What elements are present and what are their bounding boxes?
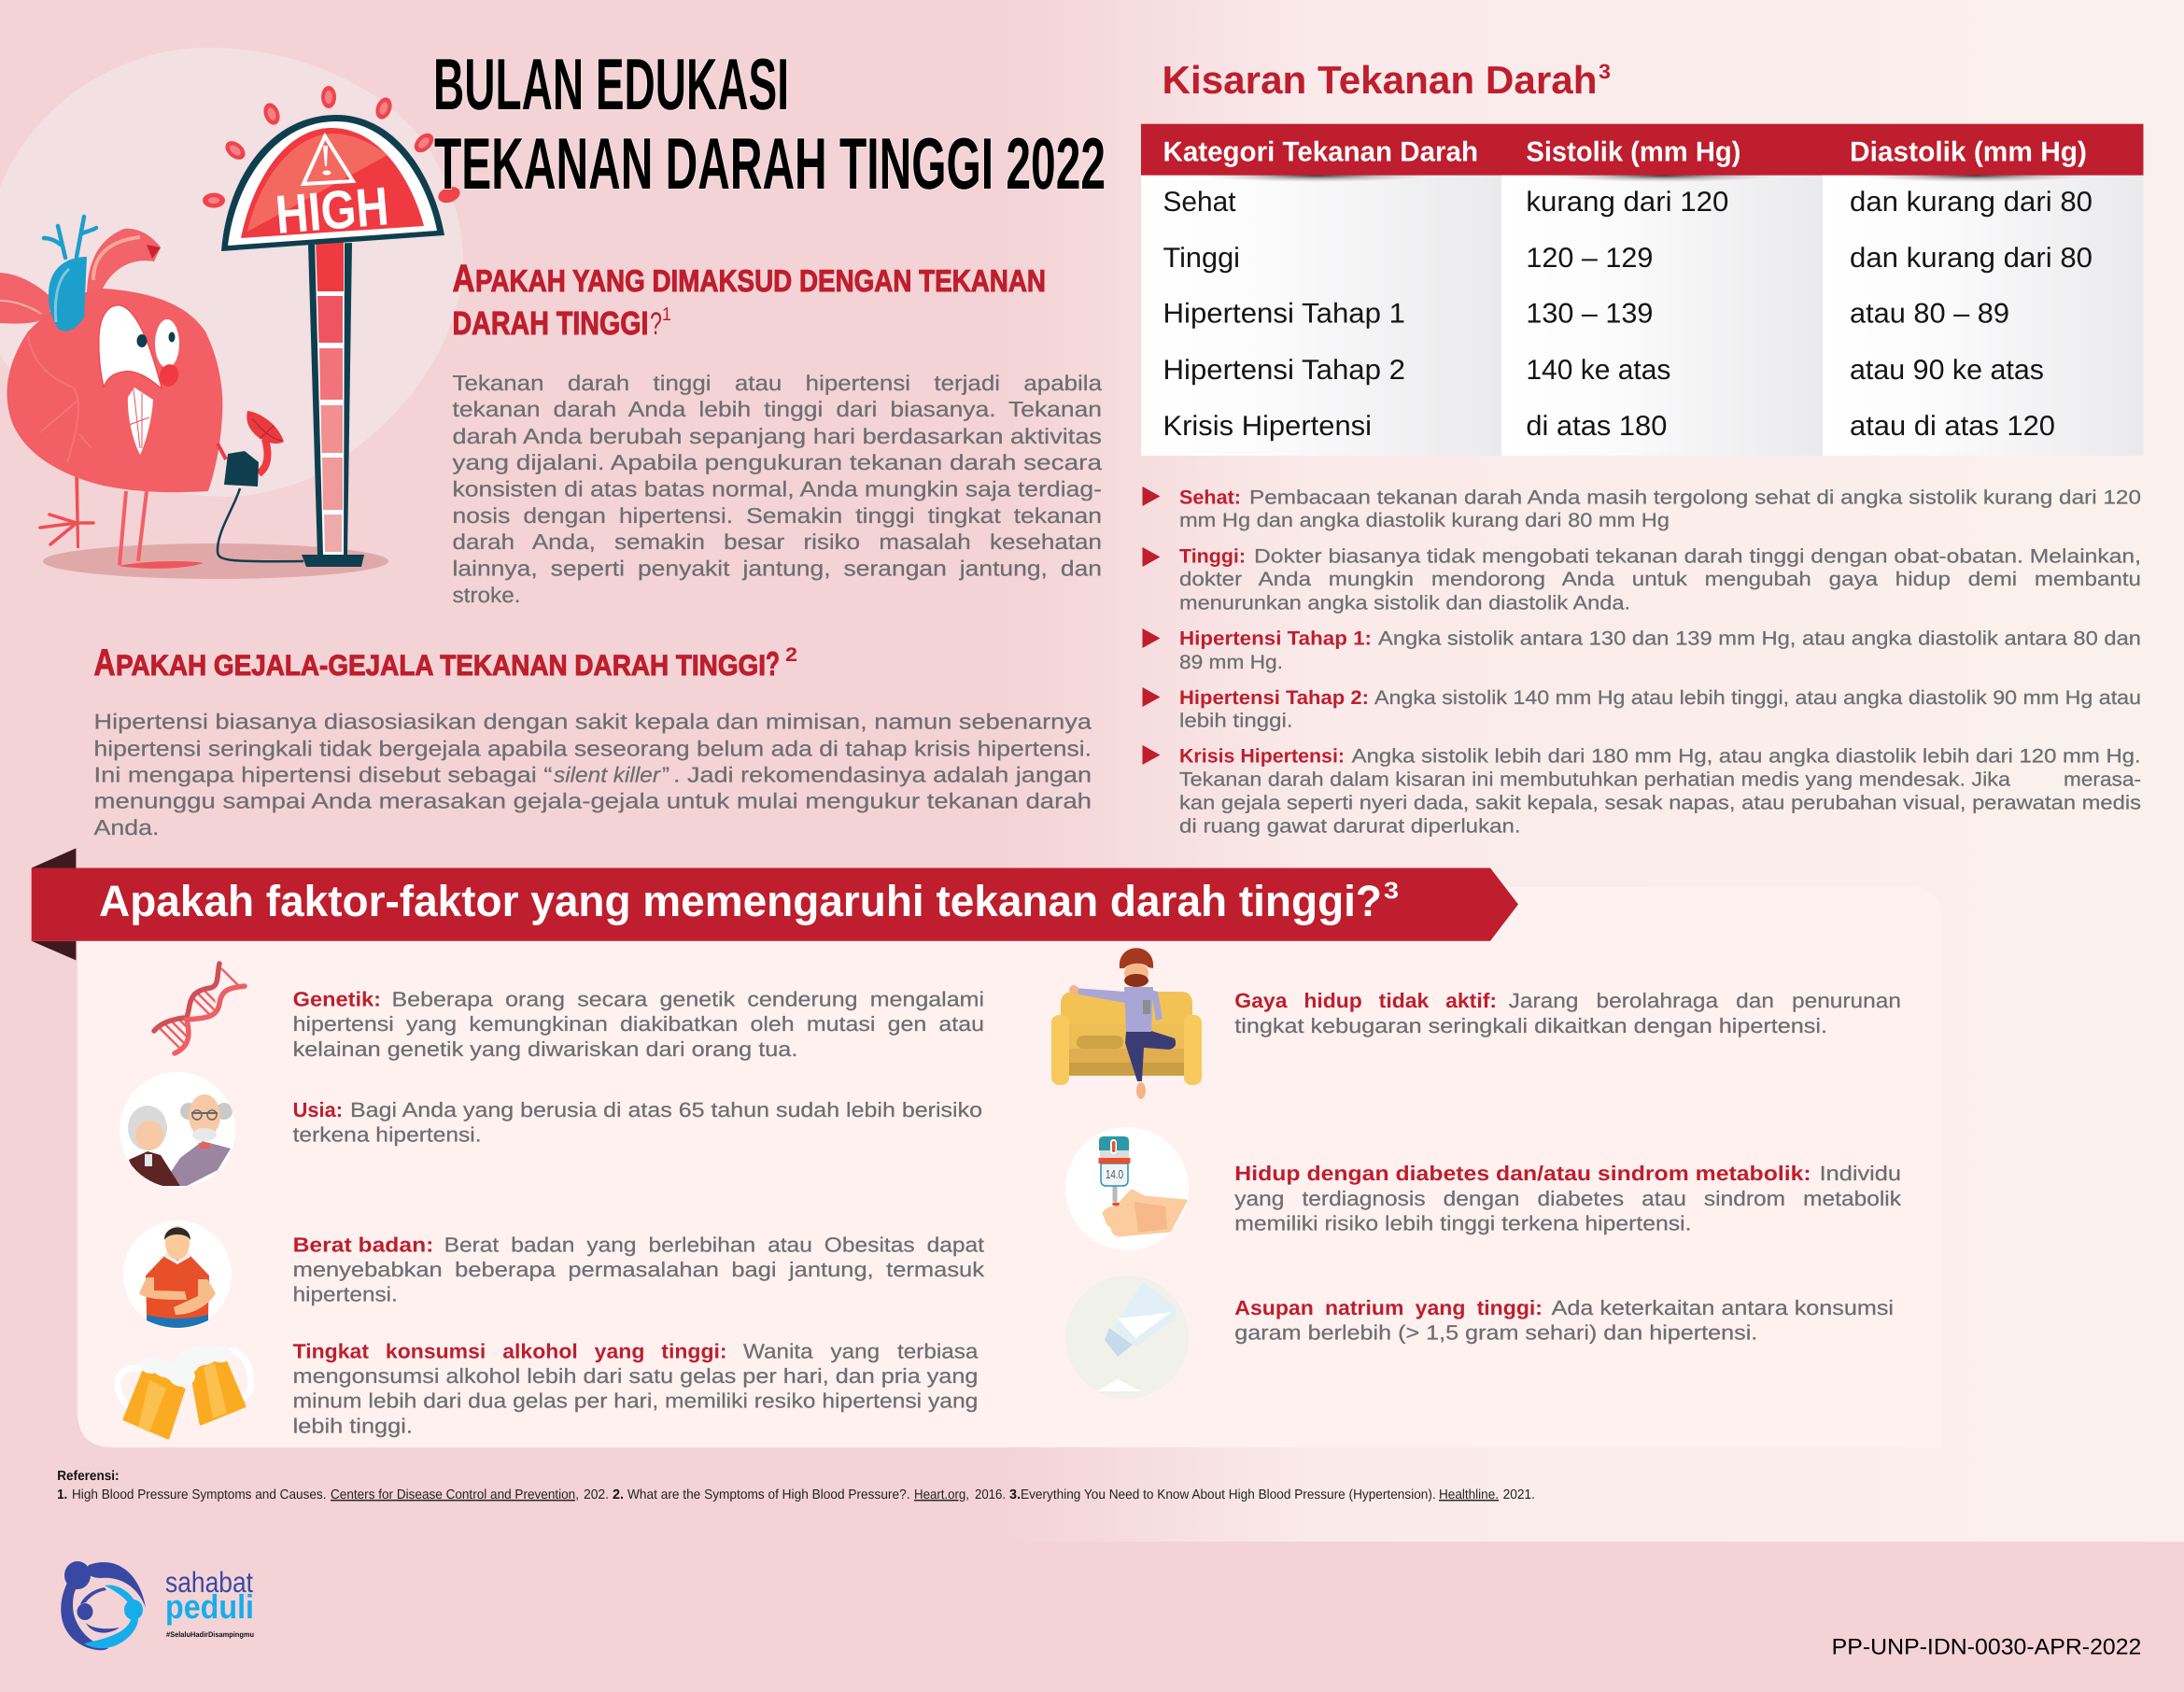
text: konsumsi alkohol: minum lebih dari dua gelas per hari, memiliki resiko hipertensi yang [293, 1389, 978, 1413]
text: berat badan: menyebabkan beberapa permasalahan bagi jantung, termasuk [293, 1258, 985, 1281]
item: hipertensi tahap 2: Hipertensi Tahap 2: [1179, 687, 1369, 709]
item: tinggi: dokter Anda mungkin mendorong Anda untuk mengubah gaya hidup demi membantu [1179, 569, 2141, 590]
heart character [0, 217, 303, 569]
text: symptoms paragraph: Ini mengapa hipertensi disebut sebagai “ [93, 763, 553, 787]
table: blood pressure categories: Tinggi [1163, 243, 1240, 274]
logo: sahabat peduli: sahabat [165, 1566, 253, 1599]
document code: PP-UNP-IDN-0030-APR-2022 [1832, 1635, 2141, 1660]
text: natrium: garam berlebih (> 1,5 gram sehari) dan hipertensi. [1234, 1321, 1757, 1345]
title [433, 43, 1106, 204]
item: krisis hipertensi: merasa- [2064, 769, 2141, 791]
text: genetik: Beberapa orang secara genetik cenderung mengalami [392, 988, 984, 1011]
table: blood pressure categories: Diastolik (mm Hg) [1850, 137, 2087, 168]
item: tinggi: Dokter biasanya tidak mengobati tekanan darah tinggi dengan obat-obatan. Melainkan, [1254, 546, 2141, 568]
text: symptoms paragraph: Hipertensi biasanya diasosiasikan dengan sakit kepala dan mimisan, namun sebenarnya [93, 710, 1092, 734]
list: category explanations [1143, 486, 2141, 838]
table: blood pressure categories: atau 80 – 89 [1850, 299, 2009, 330]
text: natrium: Ada keterkaitan antara konsumsi [1552, 1296, 1894, 1319]
table: blood pressure categories: Sistolik (mm Hg) [1526, 137, 1740, 168]
item: tinggi [1143, 546, 2141, 614]
item: sehat: Pembacaan tekanan darah Anda masih tergolong sehat di angka sistolik kurang dari 120 [1249, 486, 2141, 508]
text: symptoms paragraph: menunggu sampai Anda merasakan gejala-gejala untuk mulai mengukur tekanan darah [93, 789, 1092, 813]
text: gaya hidup: tingkat kebugaran seringkali dikaitkan dengan hipertensi. [1234, 1014, 1827, 1037]
banner: risk factors heading: 3 [1384, 878, 1399, 904]
text: genetik: kelainan genetik yang diwariskan dari orang tua. [293, 1037, 797, 1061]
item: tinggi: menurunkan angka sistolik dan diastolik Anda. [1179, 593, 1630, 614]
icon: glucose meter: 14.0 [1106, 1167, 1123, 1181]
text: usia: Bagi Anda yang berusia di atas 65 tahun sudah lebih berisiko [350, 1098, 982, 1121]
text: symptoms paragraph: hipertensi seringkali tidak bergejala apabila seseorang belum ada di tahap krisis hipertensi. [93, 736, 1092, 760]
text: definition paragraph: darah Anda berubah sepanjang hari berdasarkan aktivitas [452, 424, 1102, 448]
table: blood pressure categories: 140 ke atas [1526, 355, 1670, 386]
item: krisis hipertensi: Tekanan darah dalam kisaran ini membutuhkan perhatian medis yang mendesak. Jika [1179, 769, 2010, 791]
text: definition paragraph: tekanan darah Anda lebih tinggi dari biasanya. Tekanan [452, 397, 1102, 421]
item: tinggi: Tinggi: [1179, 546, 1246, 568]
item: hipertensi tahap 2 [1143, 687, 2141, 732]
table: blood pressure categories: dan kurang dari 80 [1850, 243, 2092, 274]
heading: kisaran tekanan darah: Kisaran Tekanan Darah [1162, 58, 1597, 102]
table: blood pressure categories: atau 90 ke atas [1850, 355, 2044, 386]
table: blood pressure categories: kurang dari 120 [1526, 187, 1728, 218]
item: sehat: mm Hg dan angka diastolik kurang dari 80 mm Hg [1179, 510, 1670, 531]
panel: risk factors [32, 848, 1941, 1447]
logo: sahabat peduli: peduli [165, 1587, 254, 1626]
text: berat badan: Berat badan: [293, 1234, 433, 1257]
item: hipertensi tahap 1 [1143, 628, 2141, 673]
references: 202. [584, 1488, 609, 1502]
table: blood pressure categories: atau di atas 120 [1850, 411, 2055, 442]
text: usia [293, 1098, 982, 1146]
text: symptoms paragraph: ” [662, 763, 669, 787]
logo: sahabat peduli: #SelaluHadirDisampingmu [166, 1630, 254, 1639]
text: natrium [1234, 1296, 1894, 1345]
text: diabetes: Hidup dengan diabetes dan/atau sindrom metabolik: [1234, 1162, 1811, 1185]
item: hipertensi tahap 1: Angka sistolik antara 130 dan 139 mm Hg, atau angka diastolik antara 80 dan [1378, 628, 2141, 650]
text: definition paragraph: konsisten di atas batas normal, Anda mungkin saja terdiag- [452, 476, 1102, 501]
text: symptoms paragraph: silent killer [554, 763, 661, 787]
item: krisis hipertensi: di ruang gawat darurat diperlukan. [1179, 816, 1521, 838]
table: blood pressure categories [1141, 124, 2144, 456]
text: diabetes: yang terdiagnosis dengan diabetes atau sindrom metabolik [1234, 1187, 1902, 1210]
table: blood pressure categories: Krisis Hipertensi [1163, 411, 1372, 442]
icon: overweight man [123, 1220, 232, 1329]
sign pole [302, 238, 364, 567]
text: berat badan [293, 1234, 985, 1306]
title: BULAN EDUKASI [433, 43, 789, 125]
references: 2016. [975, 1488, 1006, 1502]
heading: gejala: ? [766, 644, 780, 683]
references [57, 1469, 1535, 1502]
references: Referensi: [57, 1469, 120, 1484]
icon: elderly couple [120, 1072, 235, 1188]
item: hipertensi tahap 1: Hipertensi Tahap 1: [1179, 628, 1372, 650]
references: 1. [57, 1488, 67, 1502]
references: 2. [613, 1488, 624, 1502]
text: gaya hidup: Jarang berolahraga dan penurunan [1509, 989, 1901, 1012]
text: diabetes: memiliki risiko lebih tinggi terkena hipertensi. [1234, 1211, 1692, 1234]
heading: apa itu tekanan darah tinggi [452, 257, 1046, 342]
heading: apa itu tekanan darah tinggi: DARAH TINGGI [452, 305, 648, 342]
table: blood pressure categories: Hipertensi Tahap 2 [1163, 355, 1405, 386]
table: blood pressure categories: 130 – 139 [1526, 299, 1653, 330]
heading: apa itu tekanan darah tinggi: ? [650, 306, 662, 342]
text: usia: terkena hipertensi. [293, 1122, 482, 1146]
text: konsumsi alkohol: Wanita yang terbiasa [743, 1339, 979, 1362]
text: symptoms paragraph: Anda. [93, 815, 159, 839]
heading: gejala: PAKAH GEJALA-GEJALA TEKANAN DARAH TINGGI [116, 649, 766, 682]
text: definition paragraph: lainnya, seperti penyakit jantung, serangan jantung, dan [452, 557, 1102, 581]
references: Centers for Disease Control and Prevention, [331, 1488, 579, 1502]
item: hipertensi tahap 2: Angka sistolik 140 mm Hg atau lebih tinggi, atau angka diastolik 90 mm Hg atau [1374, 687, 2141, 709]
item: sehat [1143, 486, 2141, 531]
text: symptoms paragraph: . Jadi rekomendasinya adalah jangan [673, 763, 1092, 787]
text: gaya hidup [1234, 989, 1901, 1037]
icon: man on sofa [1051, 948, 1202, 1099]
table: blood pressure categories: dan kurang dari 80 [1850, 187, 2092, 218]
table: blood pressure categories: di atas 180 [1526, 411, 1667, 442]
icon: beer mugs [118, 1345, 251, 1438]
heading: gejala: 2 [785, 644, 797, 666]
text: konsumsi alkohol: Tingkat konsumsi alkohol yang tinggi: [293, 1339, 727, 1362]
text: definition paragraph [452, 371, 1102, 607]
icon: salt shaker [1065, 1276, 1189, 1399]
table: blood pressure categories: Hipertensi Tahap 1 [1163, 299, 1405, 330]
sign dome [221, 115, 444, 251]
text: definition paragraph: stroke. [452, 583, 521, 607]
text: usia: Usia: [293, 1098, 343, 1121]
logo: sahabat peduli [61, 1561, 254, 1650]
text: berat badan: hipertensi. [293, 1283, 398, 1306]
references: 3. [1009, 1488, 1021, 1502]
sign dome: HIGH [274, 176, 391, 246]
banner: risk factors heading [32, 848, 1518, 960]
item: krisis hipertensi: Krisis Hipertensi: [1179, 746, 1345, 768]
text: symptoms paragraph [93, 710, 1092, 839]
references: What are the Symptoms of High Blood Pressure?. [627, 1488, 909, 1502]
references: Heart.org, [914, 1488, 969, 1502]
heading: apa itu tekanan darah tinggi: A [452, 257, 474, 300]
text: konsumsi alkohol [293, 1339, 979, 1437]
heading: gejala: A [93, 642, 116, 684]
text: konsumsi alkohol: lebih tinggi. [293, 1414, 413, 1437]
table: blood pressure categories: Sehat [1163, 187, 1236, 218]
item: krisis hipertensi: kan gejala seperti nyeri dada, sakit kepala, sesak napas, atau perubahan visual, perawatan medis [1179, 793, 2141, 814]
text: diabetes: Individu [1820, 1162, 1901, 1185]
references: Everything You Need to Know About High Blood Pressure (Hypertension). [1021, 1488, 1436, 1502]
text: definition paragraph: yang dijalani. Apabila pengukuran tekanan darah secara [452, 450, 1102, 474]
illustration: heart with high blood pressure sign [0, 48, 463, 579]
banner: risk factors heading: Apakah faktor-faktor yang memengaruhi tekanan darah tinggi? [99, 876, 1382, 925]
heading: kisaran tekanan darah: 3 [1599, 60, 1611, 83]
text: definition paragraph: darah Anda, semakin besar risiko masalah kesehatan [452, 529, 1102, 554]
text: genetik [293, 988, 984, 1061]
heading: apa itu tekanan darah tinggi: PAKAH YANG DIMAKSUD DENGAN TEKANAN [475, 263, 1046, 298]
title: TEKANAN DARAH TINGGI 2022 [434, 122, 1106, 204]
item: krisis hipertensi [1143, 745, 2141, 838]
text: definition paragraph: nosis dengan hipertensi. Semakin tinggi tingkat tekanan [452, 503, 1102, 528]
item: sehat: Sehat: [1179, 486, 1241, 508]
references: Healthline. [1439, 1488, 1499, 1502]
item: hipertensi tahap 2: lebih tinggi. [1179, 711, 1292, 732]
text: berat badan: Berat badan yang berlebihan atau Obesitas dapat [444, 1234, 984, 1257]
text: gaya hidup: Gaya hidup tidak aktif: [1234, 989, 1497, 1012]
text: genetik: Genetik: [293, 988, 381, 1011]
text: diabetes [1234, 1162, 1902, 1234]
references: 2021. [1503, 1488, 1535, 1502]
table: blood pressure categories: 120 – 129 [1526, 243, 1653, 274]
text: definition paragraph: Tekanan darah tinggi atau hipertensi terjadi apabila [452, 371, 1102, 395]
text: genetik: hipertensi yang kemungkinan diakibatkan oleh mutasi gen atau [293, 1012, 984, 1036]
text: konsumsi alkohol: mengonsumsi alkohol lebih dari satu gelas per hari, dan pria yang [293, 1364, 978, 1388]
table: blood pressure categories: Kategori Tekanan Darah [1163, 137, 1478, 168]
heading: apa itu tekanan darah tinggi: 1 [662, 304, 671, 325]
references: High Blood Pressure Symptoms and Causes. [72, 1488, 327, 1502]
icon: glucose meter [1065, 1127, 1189, 1250]
icon: DNA [151, 961, 247, 1056]
text: natrium: Asupan natrium yang tinggi: [1234, 1296, 1543, 1319]
item: hipertensi tahap 1: 89 mm Hg. [1179, 652, 1283, 673]
item: krisis hipertensi: Angka sistolik lebih dari 180 mm Hg, atau angka diastolik lebih dari 120 mm Hg. [1352, 746, 2141, 768]
